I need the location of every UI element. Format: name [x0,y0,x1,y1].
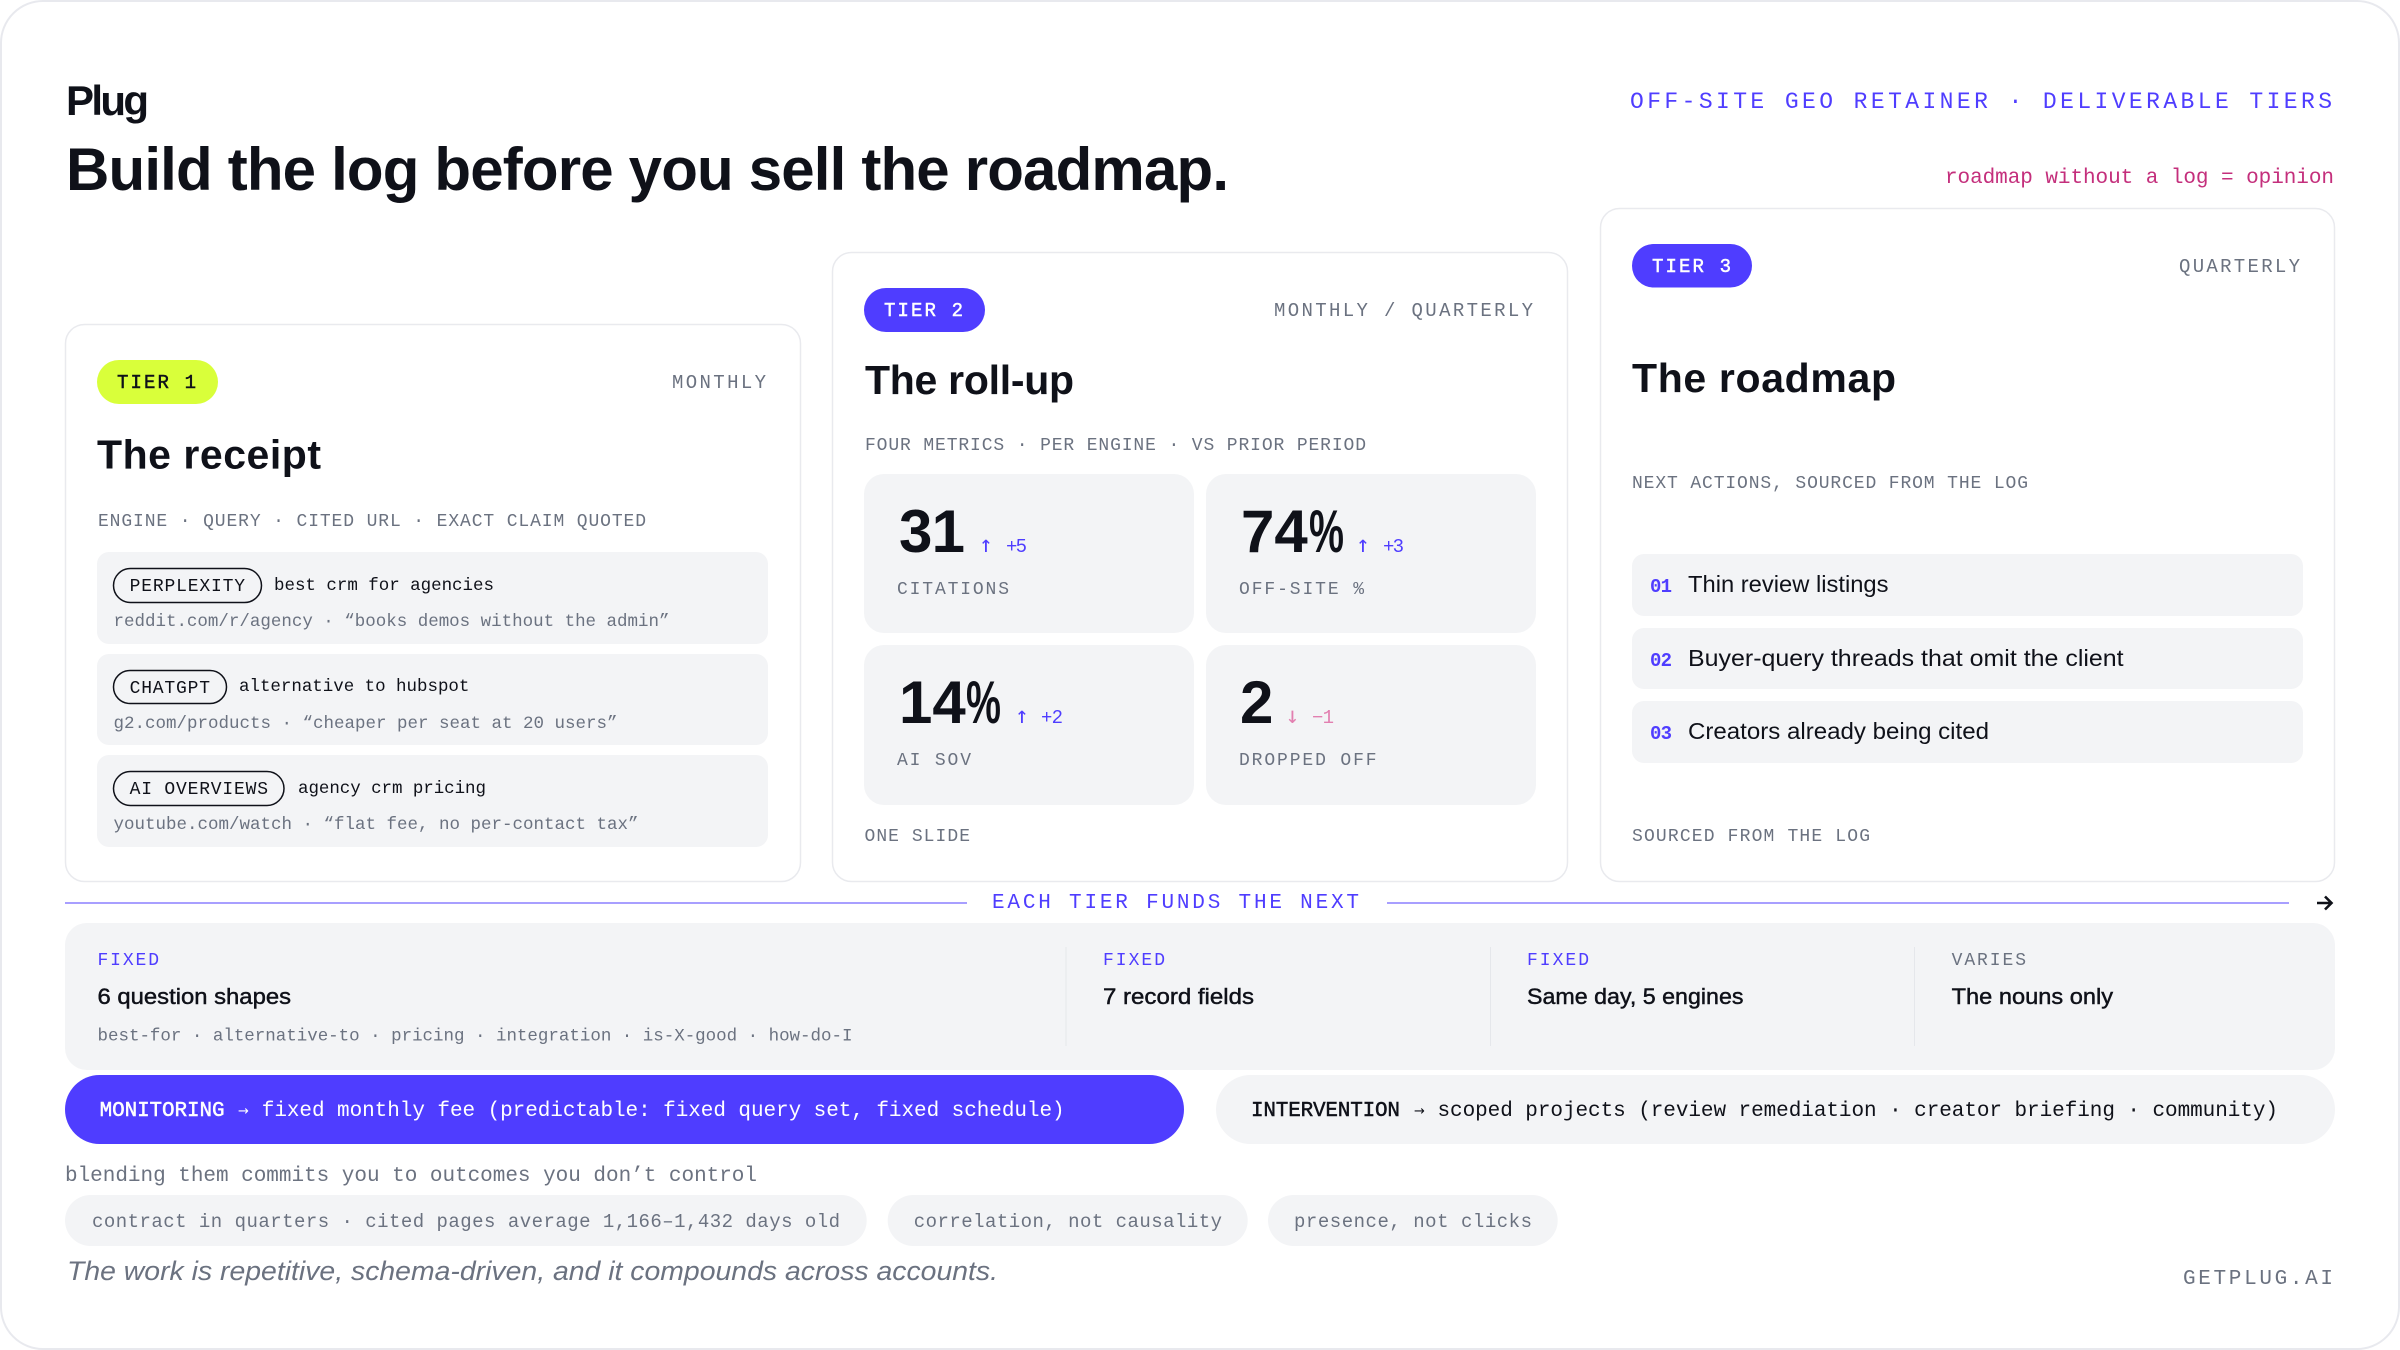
arrow [2317,896,2332,910]
schema: record fields: 7 record fields [1103,984,1254,1009]
tier 3 fields: NEXT ACTIONS, SOURCED FROM THE LOG [1632,474,2028,494]
metric: citations: 31 [899,498,965,565]
metric: citations: ↑ [979,532,993,558]
panel: tier 1 the receipt [66,324,800,882]
chip: presence [1268,1195,1558,1246]
action 03 [1632,701,2303,763]
action 01: 01 [1650,576,1672,598]
eyebrow: retainer label: OFF-SITE GEO RETAINER · DELIVERABLE TIERS [1630,89,2332,115]
flow connector: each tier funds the next [65,892,2332,915]
action 01 [1632,554,2303,616]
pill: intervention: → [1414,1104,1425,1119]
metric: off-site share: OFF-SITE % [1239,580,1364,600]
tier 2 fields: FOUR METRICS · PER ENGINE · VS PRIOR PERIOD [865,436,1366,456]
tier 1 cadence: MONTHLY [672,372,767,394]
metric: off-site share [1206,474,1536,633]
tier 3 badge [1632,244,1752,288]
pill: monitoring: MONITORING [100,1100,225,1123]
schema: record fields [1103,951,1254,1009]
tier 3 heading: The roadmap [1632,355,1896,401]
tier 3 badge: TIER 3 [1652,256,1731,278]
pill: intervention [1216,1075,2335,1144]
action 02: 02 [1650,650,1672,672]
chip: presence: presence, not clicks [1294,1211,1532,1233]
receipt row: chatgpt [97,654,768,745]
tier 1 badge: TIER 1 [117,372,196,394]
metric: off-site share: +3 [1383,536,1404,558]
schema: nouns vary [1952,951,2113,1009]
flow connector: each tier funds the next: EACH TIER FUNDS THE NEXT [992,892,1359,915]
metric: ai share of voice: ↑ [1015,703,1029,729]
pill: intervention: scoped projects (review remediation · creator briefing · community) [1438,1100,2278,1123]
metric: ai share of voice: 14 [899,669,966,736]
metric: dropped off: ↓ [1286,703,1299,729]
receipt row: ai overviews [97,755,768,847]
action 03: Creators already being cited [1688,718,1989,744]
tagline: The work is repetitive, schema-driven, and it compounds across accounts. [67,1256,998,1286]
schema: cadence and engines: FIXED [1527,951,1589,971]
schema: question shapes: FIXED [98,951,159,971]
receipt row: perplexity [97,552,768,644]
tier 1 badge [97,360,218,404]
metric: ai share of voice: +2 [1041,707,1063,729]
schema: record fields: FIXED [1103,951,1165,971]
metric: ai share of voice: AI SOV [897,751,971,771]
receipt row: ai overviews: AI OVERVIEWS [130,780,268,800]
tier 3 cadence: QUARTERLY [2179,256,2301,278]
schema: nouns vary: The nouns only [1952,984,2113,1009]
receipt row: chatgpt: alternative to hubspot [239,677,469,697]
footer url: GETPLUG.AI [2183,1268,2333,1291]
receipt row: ai overviews: agency crm pricing [298,779,486,799]
tier 3 footer: SOURCED FROM THE LOG [1632,827,1870,847]
callout: roadmap without a log: roadmap without a log = opinion [1945,167,2334,190]
metric: citations: +5 [1006,536,1027,558]
schema: question shapes: best-for · alternative-to · pricing · integration · is-X-good · how-do-I [98,1026,852,1046]
schema: nouns vary: VARIES [1952,951,2026,971]
pill: intervention: INTERVENTION [1251,1100,1400,1123]
receipt row: perplexity: reddit.com/r/agency · “books demos without the admin” [114,612,670,632]
metric: citations: CITATIONS [897,580,1009,600]
receipt row: ai overviews: youtube.com/watch · “flat fee, no per-contact tax” [114,815,638,835]
chip: contract and page age: contract in quarters · cited pages average 1,166–1,432 days old [92,1211,840,1233]
pill: monitoring: → [238,1104,249,1119]
panel: tier 3 the roadmap [1600,208,2334,882]
tier 2 badge [864,288,985,332]
receipt row: chatgpt: g2.com/products · “cheaper per seat at 20 users” [114,714,618,734]
receipt row: perplexity: PERPLEXITY [130,577,245,597]
metric: dropped off: −1 [1312,707,1334,729]
chip: correlation [888,1195,1248,1246]
metric: citations [864,474,1194,633]
panel: schema band [65,923,2335,1070]
schema: question shapes: 6 question shapes [98,984,291,1009]
metric: ai share of voice: % [966,669,1001,736]
receipt row: perplexity: best crm for agencies [274,576,494,596]
tier 1 heading: The receipt [97,432,321,478]
metric: dropped off: DROPPED OFF [1239,751,1377,771]
metric: dropped off: 2 [1240,669,1273,736]
action 02 [1632,628,2303,689]
title: Build the log before you sell the roadmap. [66,136,1229,203]
pill: monitoring [65,1075,1184,1144]
action 03: 03 [1650,723,1672,745]
schema: question shapes [98,951,852,1046]
action 01: Thin review listings [1688,571,1888,597]
pill: monitoring: fixed monthly fee (predictable: fixed query set, fixed schedule) [262,1100,1065,1123]
warning line: blending them commits you to outcomes you don’t control [65,1165,757,1188]
panel: tier 2 the roll-up [832,252,1568,882]
action 02: Buyer-query threads that omit the client [1688,645,2124,671]
receipt row: chatgpt: CHATGPT [130,679,210,699]
chip: contract and page age [65,1195,867,1246]
metric: ai share of voice [864,645,1194,805]
metric: off-site share: 74 [1241,498,1308,565]
chip: correlation: correlation, not causality [914,1211,1222,1233]
tier 2 badge: TIER 2 [884,300,963,322]
metric: off-site share: % [1309,498,1344,565]
metric: dropped off [1206,645,1536,805]
schema: cadence and engines: Same day, 5 engines [1527,984,1744,1009]
schema: cadence and engines [1527,951,1744,1009]
tier 2 heading: The roll-up [865,357,1074,403]
metric: off-site share: ↑ [1356,532,1370,558]
tier 1 fields: ENGINE · QUERY · CITED URL · EXACT CLAIM QUOTED [98,512,646,532]
tier 2 cadence: MONTHLY / QUARTERLY [1274,300,1534,322]
brand name: Plug [66,77,149,124]
tier 2 footer: ONE SLIDE [864,827,970,847]
